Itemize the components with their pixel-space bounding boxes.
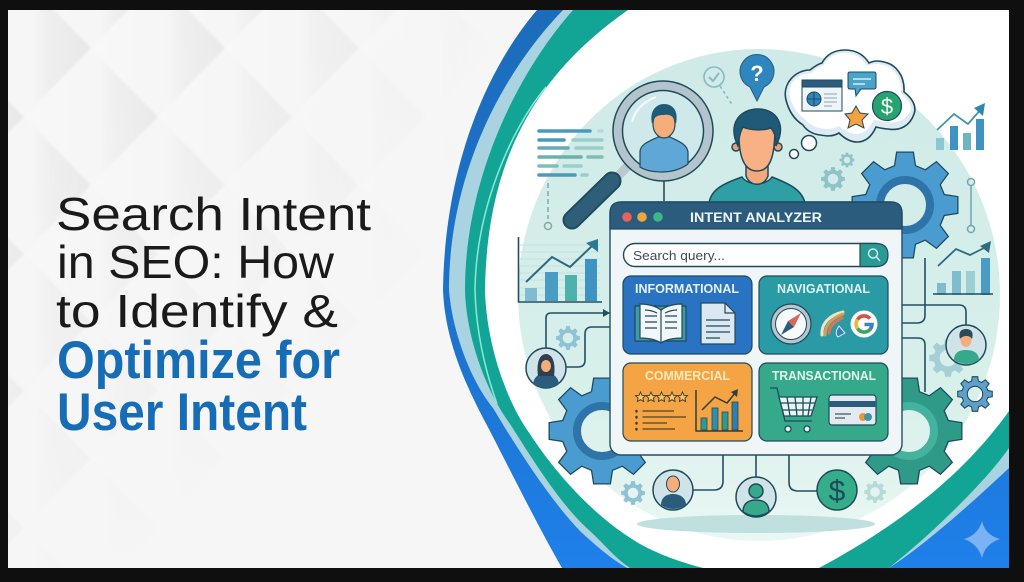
title highlight: User Intent: User Intent bbox=[57, 383, 307, 442]
text lines icon bbox=[539, 131, 602, 175]
icon: review list bbox=[636, 411, 686, 430]
star icon bbox=[845, 106, 868, 128]
icon: star rating bbox=[636, 392, 688, 402]
card: transactional: TRANSACTIONAL bbox=[772, 368, 876, 383]
title line: to Identify &: to Identify & bbox=[56, 285, 338, 337]
dollar coin node bbox=[817, 470, 857, 510]
small gears near cloud bbox=[821, 153, 854, 191]
avatar: person right bbox=[946, 325, 986, 365]
small decorative gears bbox=[556, 326, 992, 505]
connector lines bbox=[546, 181, 966, 491]
right trend chart bbox=[933, 241, 993, 295]
title line: in SEO: How: in SEO: How bbox=[57, 236, 335, 288]
check circle icon bbox=[704, 67, 733, 106]
avatar: person bottom bbox=[653, 470, 693, 510]
avatar: woman left bbox=[526, 348, 566, 388]
card: commercial: COMMERCIAL bbox=[645, 368, 730, 383]
title bbox=[56, 188, 371, 442]
left trend chart bbox=[518, 237, 602, 302]
dollar coin icon: $ bbox=[881, 94, 893, 119]
sparkle icon bbox=[964, 521, 1000, 558]
dollar coin node: $ bbox=[829, 475, 846, 508]
window title bar bbox=[610, 202, 902, 229]
browser window icon bbox=[802, 80, 842, 111]
circular swoosh arcs bbox=[443, 10, 1009, 568]
ground shadow bbox=[637, 515, 875, 533]
icon: bar chart bbox=[696, 389, 743, 431]
large bottom left gear bbox=[549, 378, 655, 484]
intent analyzer window bbox=[610, 202, 902, 455]
card: transactional bbox=[759, 363, 888, 441]
pale mint circle backdrop bbox=[518, 49, 1000, 541]
card: informational bbox=[623, 276, 752, 354]
magnifying glass with user bbox=[572, 81, 713, 220]
icon: document bbox=[701, 303, 735, 344]
icon: open book bbox=[635, 304, 686, 343]
icon: colourful swoosh bbox=[822, 312, 845, 337]
main user figure bbox=[709, 109, 805, 203]
card: informational: INFORMATIONAL bbox=[635, 281, 739, 296]
question mark bubble bbox=[740, 55, 774, 101]
avatar: teal person bottom bbox=[736, 477, 776, 517]
window title bar: INTENT ANALYZER bbox=[690, 210, 822, 225]
background panel with geometric pattern bbox=[8, 10, 562, 568]
card: navigational: NAVIGATIONAL bbox=[777, 281, 870, 296]
search bar bbox=[624, 244, 888, 266]
title highlight: Optimize for: Optimize for bbox=[57, 331, 340, 390]
thought cloud bbox=[785, 50, 915, 158]
top right trend chart bbox=[936, 103, 985, 150]
icon: compass bbox=[771, 304, 811, 344]
card: navigational bbox=[759, 276, 888, 354]
large blue gear bbox=[852, 152, 958, 258]
search bar: Search query... bbox=[633, 248, 725, 263]
dashed pin line bbox=[544, 183, 552, 230]
chat bubble icon bbox=[848, 72, 876, 96]
question mark bubble: ? bbox=[750, 61, 764, 86]
icon: credit card bbox=[829, 395, 876, 425]
icon: shopping cart bbox=[770, 388, 817, 432]
icon: google logo bbox=[850, 310, 878, 338]
title line: Search Intent: Search Intent bbox=[56, 188, 371, 240]
vertical pin line bbox=[968, 178, 974, 232]
large bottom right gear bbox=[856, 378, 962, 484]
card: commercial bbox=[623, 363, 752, 441]
